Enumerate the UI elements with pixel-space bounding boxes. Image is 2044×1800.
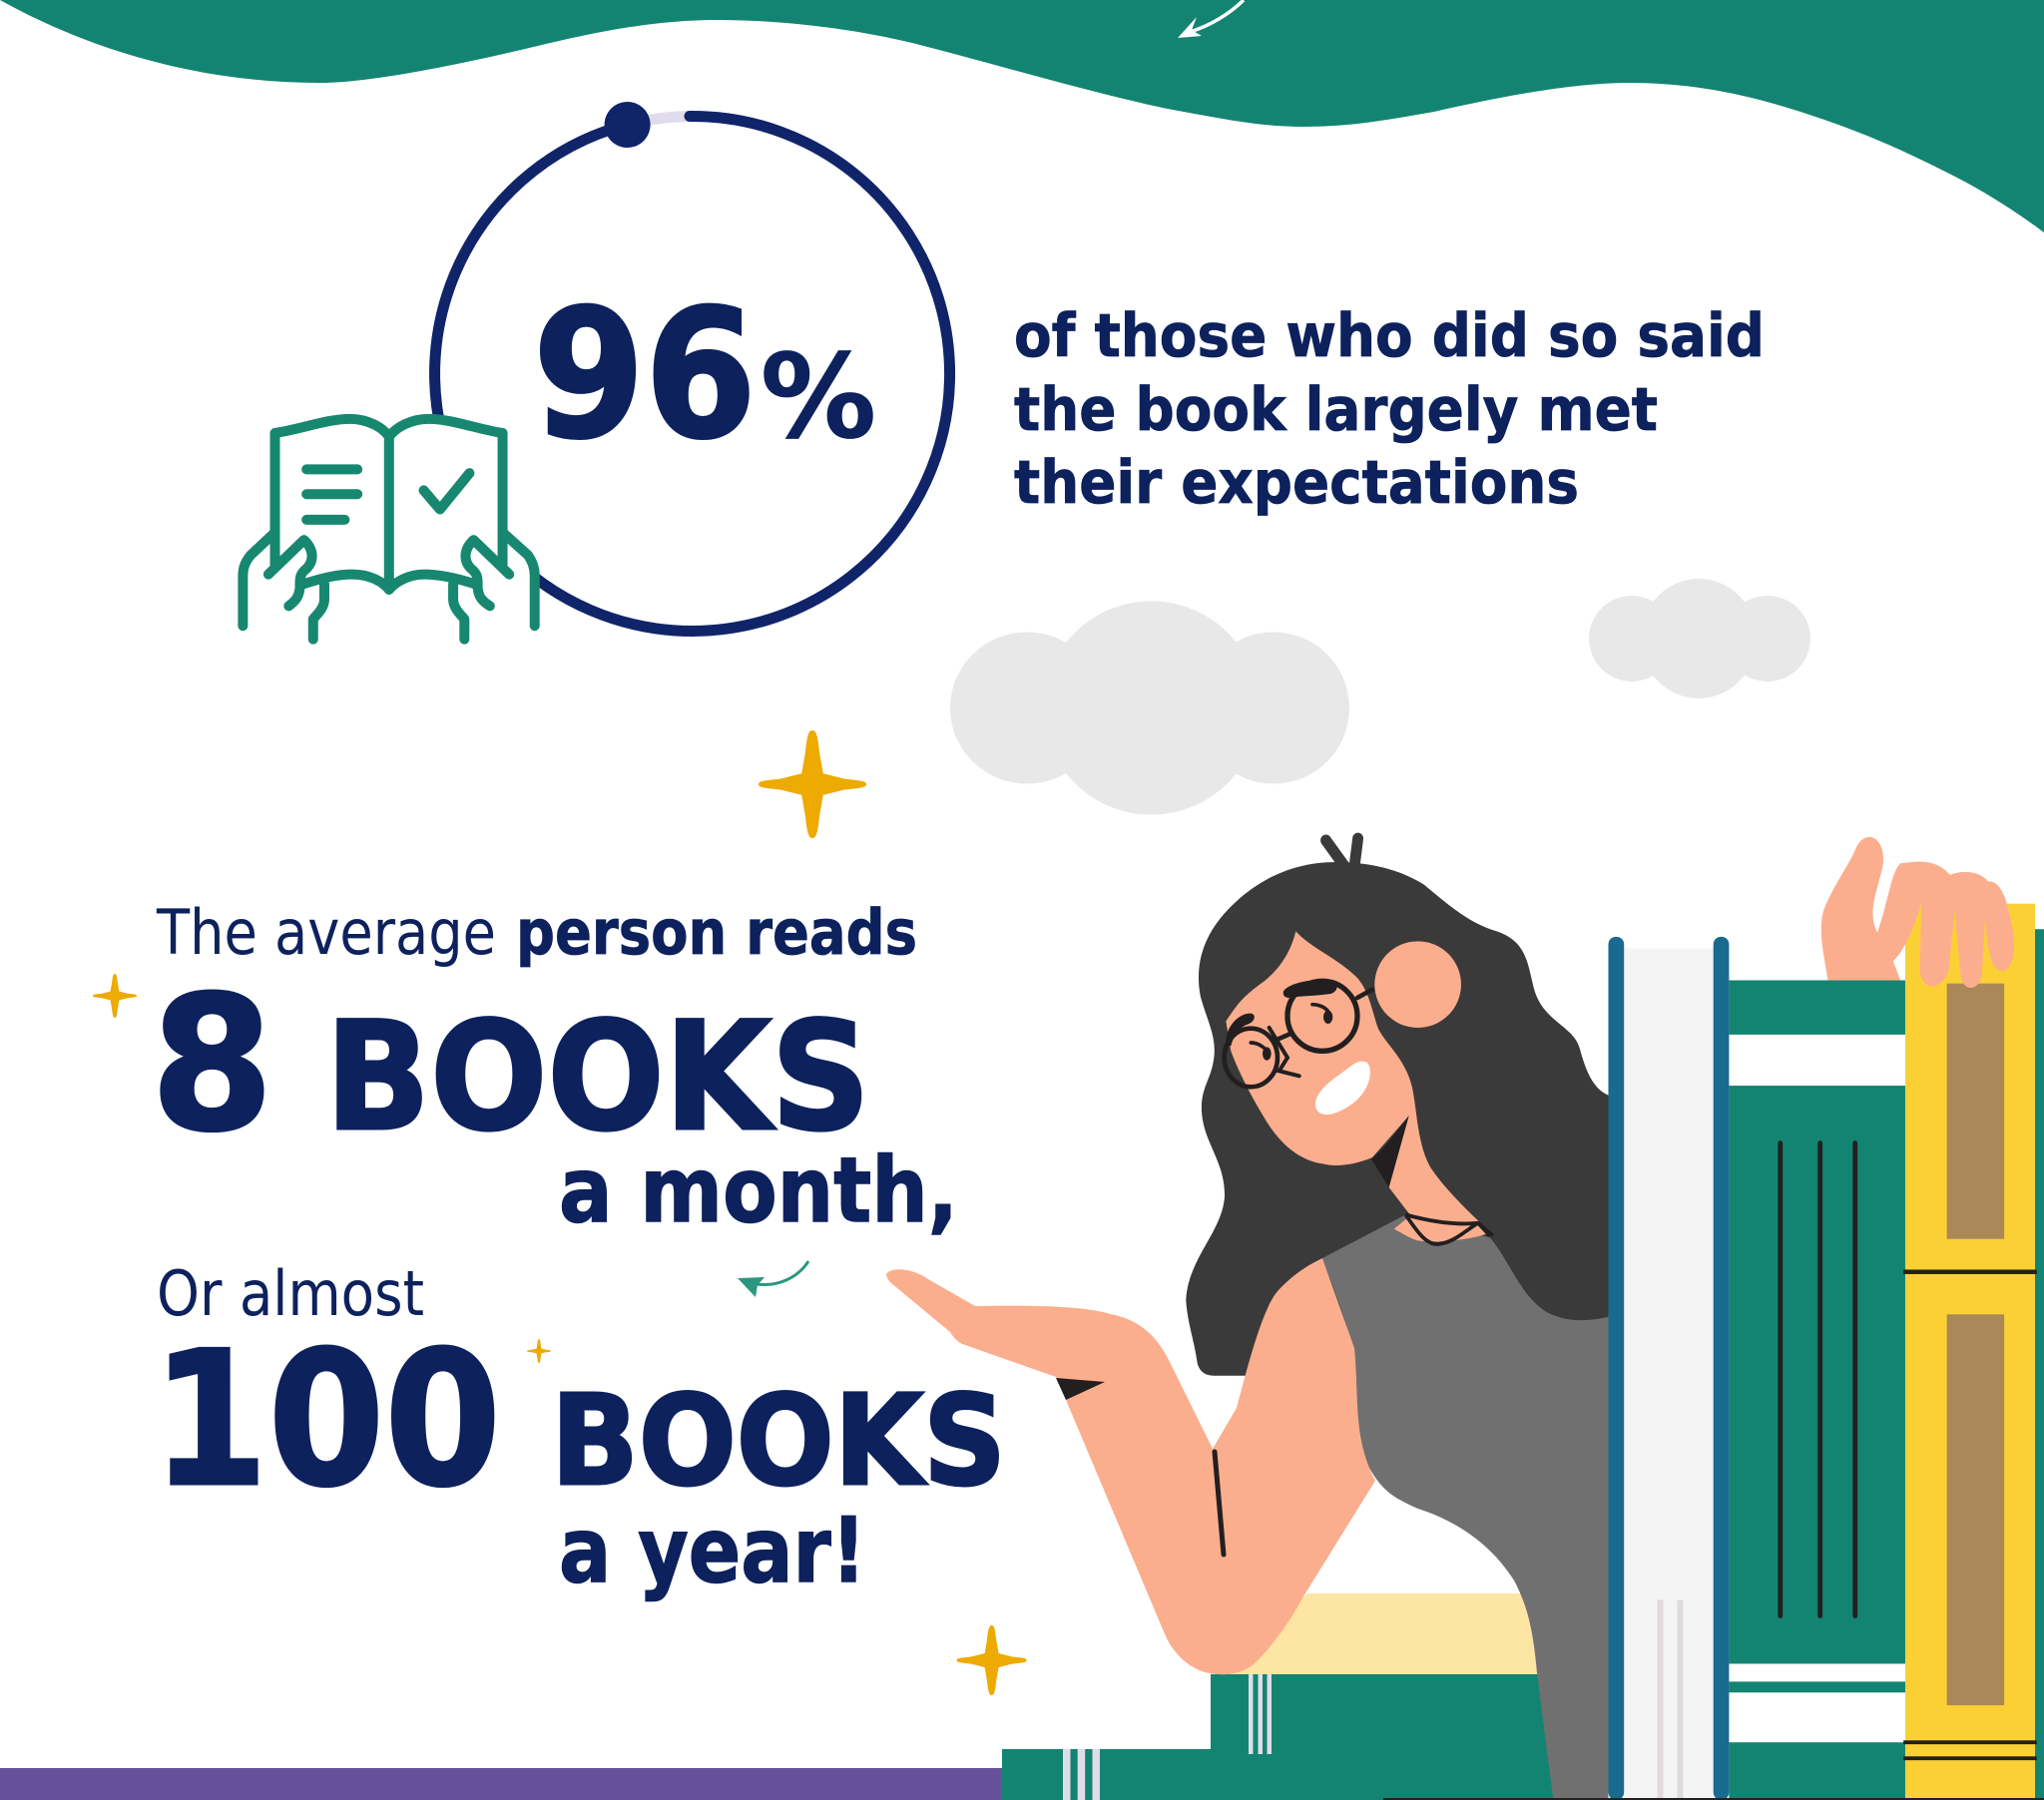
text block: 100 books a year [152,1257,1006,1603]
text block: expectations statement: the book largely met [1014,375,1658,445]
green book [1729,980,1906,1800]
progress ring: 96 percent [435,102,950,631]
stacked books under the arm [1002,1593,1562,1800]
arrow: small green curved arrow [738,1261,808,1297]
woman: arm with raised open hand [886,1258,1375,1674]
woman: necklace [1405,1214,1493,1244]
decorative gold stars [93,730,1027,1695]
text block: expectations statement: of those who did so said [1014,301,1765,371]
stat number: 96%: % [761,330,876,465]
stat number: 96%: 96 [533,271,757,478]
text block: 100 books a year: a year! [559,1499,866,1603]
arrow: white curved arrow in banner [1178,0,1244,38]
yellow book [1903,904,2037,1800]
bottom shelf line [1383,1798,2044,1800]
text block: 100 books a year: 100 [152,1311,501,1528]
white book with blue spine edges [1608,937,1729,1800]
text block: 8 books a month: a month, [559,1138,958,1243]
text block: 8 books a month: 8 [151,956,273,1172]
text block: expectations statement [1014,301,1765,518]
text block: expectations statement: their expectations [1014,448,1579,518]
top green wave banner [0,0,2044,232]
clouds [950,579,1810,814]
text block: 8 books a month: The average [156,896,496,969]
teal book at right edge [2035,929,2044,1800]
text block: 8 books a month [151,896,958,1243]
woman: grey shirt [1322,1214,1608,1800]
text block: 8 books a month: person reads [516,896,917,969]
upright books [1608,837,2044,1800]
purple footer bar [0,1768,1002,1800]
text block: 100 books a year: BOOKS [551,1369,1006,1514]
woman: face with glasses [1225,931,1490,1241]
hand gripping the books [1821,837,2014,988]
text block: 100 books a year: Or almost [157,1257,424,1330]
icon: hands holding open book with checkmark [243,419,535,640]
woman: hair [1186,838,1608,1376]
text block: 8 books a month: BOOKS [325,991,870,1164]
